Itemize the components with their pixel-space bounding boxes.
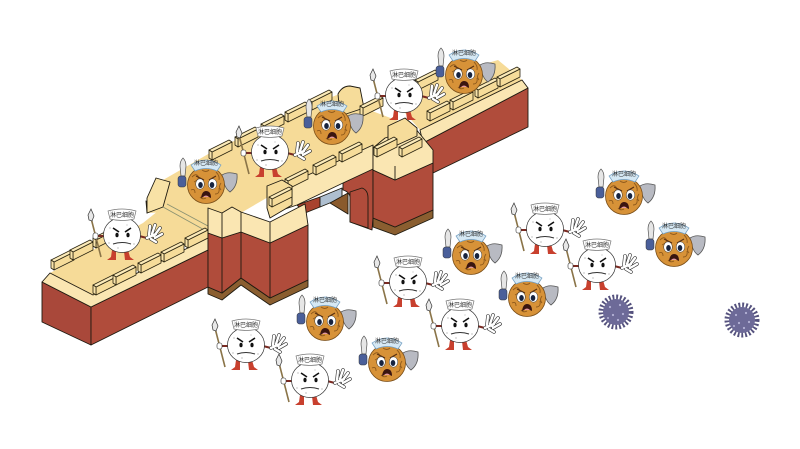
white lymphocyte 8: 淋巴细胞	[234, 321, 258, 329]
orange lymphocyte e	[499, 271, 558, 316]
white lymphocyte 3	[370, 69, 444, 120]
orange lymphocyte c: 淋巴细胞	[452, 49, 476, 57]
white lymphocyte 8	[212, 319, 286, 370]
orange lymphocyte i: 淋巴细胞	[375, 337, 399, 345]
orange lymphocyte a	[178, 158, 237, 204]
white lymphocyte 5: 淋巴细胞	[533, 205, 557, 213]
orange lymphocyte f	[596, 169, 655, 214]
white lymphocyte 6	[563, 239, 637, 290]
wall: upper middle deck	[147, 86, 417, 232]
white lymphocyte 2	[236, 126, 310, 177]
white lymphocyte 6: 淋巴细胞	[585, 241, 609, 249]
orange lymphocyte c	[436, 48, 495, 94]
white lymphocyte 1: 淋巴细胞	[110, 211, 134, 219]
virus 2	[728, 306, 756, 334]
white lymphocyte 7	[426, 299, 500, 350]
orange lymphocyte a: 淋巴细胞	[194, 159, 218, 167]
white lymphocyte 3: 淋巴细胞	[392, 71, 416, 79]
great wall fortress	[42, 60, 528, 345]
wall: left section	[42, 178, 208, 345]
white lymphocyte 9: 淋巴细胞	[298, 356, 322, 364]
orange lymphocyte h: 淋巴细胞	[313, 296, 337, 304]
orange lymphocyte d	[443, 229, 502, 274]
white lymphocyte 7: 淋巴细胞	[448, 301, 472, 309]
orange lymphocyte b	[304, 99, 363, 144]
white lymphocyte 4: 淋巴细胞	[396, 258, 420, 266]
orange lymphocyte d: 淋巴细胞	[459, 230, 483, 238]
white lymphocyte 1	[88, 209, 162, 260]
wall: gate and central front	[282, 142, 373, 230]
white lymphocyte 9	[276, 354, 350, 405]
orange lymphocyte e: 淋巴细胞	[515, 272, 539, 280]
orange lymphocyte i	[359, 336, 418, 382]
orange lymphocyte g	[646, 221, 705, 266]
wall: right gate tower	[373, 118, 433, 235]
orange lymphocyte h	[297, 295, 356, 340]
wall: right section	[398, 60, 528, 173]
virus 1	[602, 298, 630, 326]
orange lymphocyte b: 淋巴细胞	[320, 100, 344, 108]
white lymphocyte 2: 淋巴细胞	[258, 128, 282, 136]
orange lymphocyte g: 淋巴细胞	[662, 222, 686, 230]
white lymphocyte 4	[374, 256, 448, 307]
orange lymphocyte f: 淋巴细胞	[612, 170, 636, 178]
white lymphocyte 5	[511, 203, 585, 254]
wall: left gate tower	[208, 180, 308, 305]
